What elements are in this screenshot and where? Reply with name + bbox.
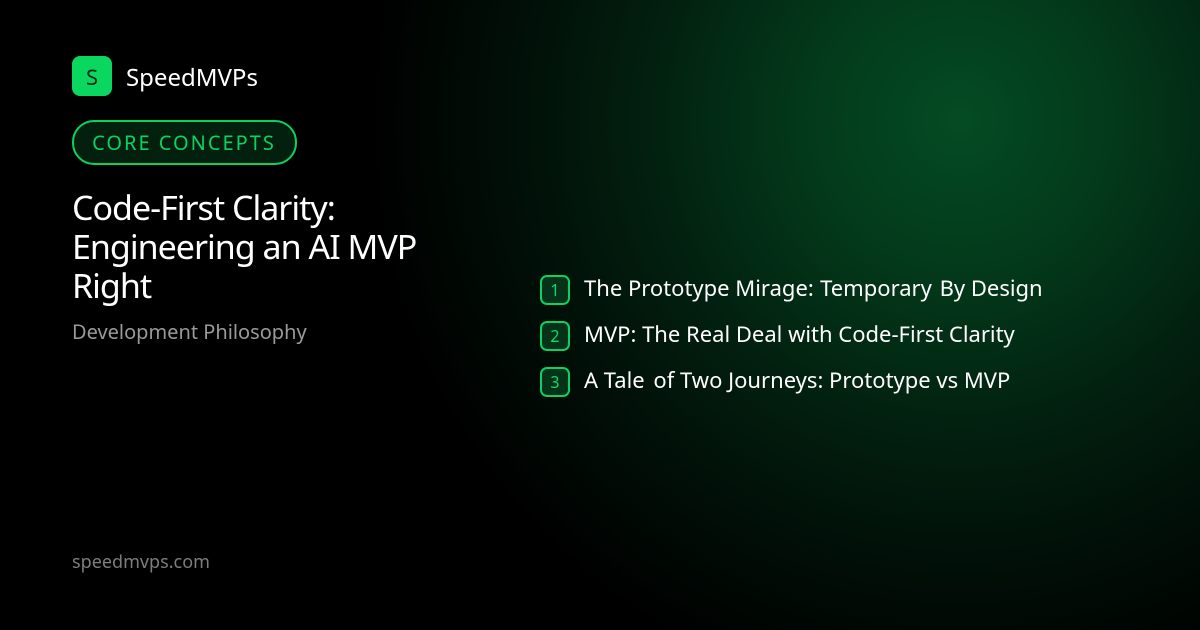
item 3 [540,365,1010,397]
number badge 3 [540,367,570,397]
title: Code-First Clarity: [72,184,335,230]
number badge 2 [540,321,570,351]
logo icon [72,56,112,96]
title: Engineering an AI MVP [72,223,416,269]
item 2 text: MVP: The Real Deal with Code-First Clarity [584,319,1015,349]
title [72,184,416,308]
item 1 text: The Prototype Mirage: Temporary By Design [584,273,1043,303]
category badge [72,120,297,165]
number badge 3: 3 [550,371,560,393]
item 1 [540,273,1043,305]
number badge 2: 2 [550,325,560,347]
title: Right [72,262,151,308]
logo icon: S [86,62,98,92]
website: speedmvps.com [72,550,210,574]
item 3 text: A Tale of Two Journeys: Prototype vs MVP [584,365,1010,395]
subtitle: Development Philosophy [72,318,307,345]
number badge 1: 1 [550,279,560,301]
item 2 [540,319,1015,351]
category badge: CORE CONCEPTS [92,129,276,156]
number badge 1 [540,275,570,305]
brand name: SpeedMVPs [126,61,258,94]
